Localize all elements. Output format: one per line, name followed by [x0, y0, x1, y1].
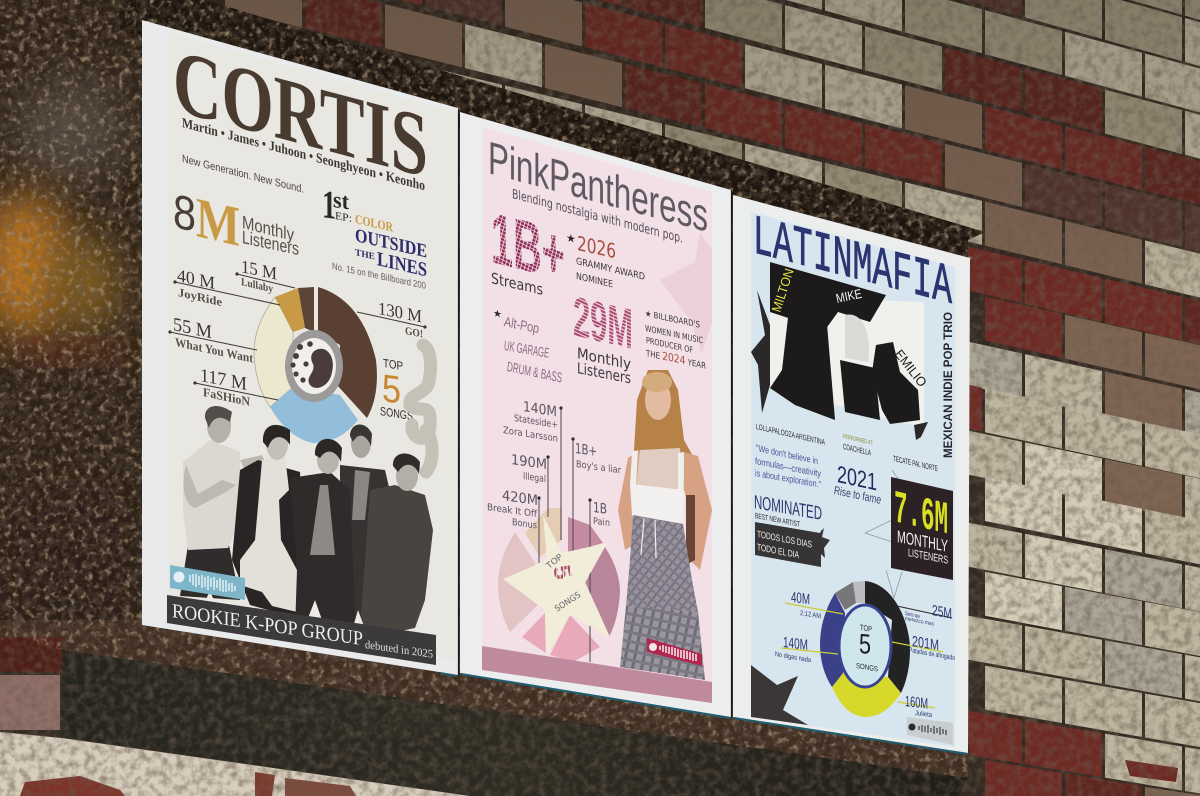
song labels with leader lines: 130 M — [378, 298, 422, 327]
peeled paint patch — [1125, 760, 1178, 782]
star: top 5 songs: TOP — [544, 552, 565, 572]
stat: 29M monthly listeners: Monthly — [577, 344, 631, 373]
EP callout: st — [333, 186, 349, 214]
festival labels — [756, 422, 938, 473]
stat: 8M monthly listeners: 8 — [173, 184, 196, 243]
song labels with leader lines: 15 M — [241, 256, 277, 284]
callout: Billboard award: ★ BILLBOARD'S — [645, 309, 700, 331]
song labels: 201M — [912, 633, 939, 654]
song labels: 40M — [791, 589, 810, 608]
callout: Billboard award: PRODUCER OF — [646, 336, 693, 356]
genre list — [493, 308, 562, 386]
EP callout: EP: — [335, 210, 352, 225]
song labels: Break It Off — [487, 502, 537, 520]
footer band — [482, 646, 712, 703]
EP callout — [322, 181, 427, 292]
song labels: Illegal — [523, 471, 546, 485]
heading: PinkPantheress: PinkPantheress — [488, 132, 708, 242]
decorative squiggle shape — [410, 345, 432, 472]
poster: PinkPantheress — [460, 112, 731, 717]
stat: 29M monthly listeners: 29M — [573, 286, 633, 362]
song labels: 1B+ — [575, 441, 597, 460]
poster seams — [458, 110, 732, 717]
stat: 8M monthly listeners: Listeners — [242, 227, 299, 259]
footer band: debuted in 2025 — [365, 639, 433, 661]
EP callout: COLOR — [355, 211, 393, 235]
star: top 5 songs — [503, 515, 610, 656]
stat: 1B+ streams — [491, 198, 565, 299]
EP callout: OUTSIDE — [355, 225, 427, 263]
dark star corner — [751, 665, 808, 725]
stat box: 7.6M monthly listeners — [891, 477, 953, 580]
song labels: 1B — [593, 500, 607, 518]
overhead steel beam — [120, 0, 985, 270]
callout: Billboard award — [645, 309, 706, 372]
stat: 29M monthly listeners: Listeners — [577, 359, 631, 387]
callout: Grammy nominee: 2026 — [577, 231, 616, 263]
song labels: Patadas de ahogado — [909, 647, 955, 662]
EP callout: No. 15 on the Billboard 200 — [332, 261, 426, 292]
song labels: Julieta — [915, 710, 932, 719]
heading: CORTIS: CORTIS — [173, 30, 428, 198]
EP callout: LINES — [377, 248, 427, 281]
quote: "We don't believe in — [756, 443, 818, 467]
outlined star decoration — [865, 470, 902, 598]
donut chart: top 5 songs — [820, 581, 910, 717]
callout: top 5 songs: SONGS — [380, 404, 413, 423]
stat box: 7.6M monthly listeners: 7.6M — [894, 483, 948, 547]
poster: CORTIS — [142, 20, 458, 675]
quote — [755, 443, 821, 491]
footer band — [167, 595, 436, 665]
photo: trio collage — [751, 262, 930, 440]
icon: music scan code — [907, 717, 953, 745]
callout: top 5 songs: TOP — [383, 356, 403, 373]
icon: music scan code — [647, 638, 702, 666]
icon: music scan code — [170, 565, 245, 600]
callout: top 5 songs — [380, 356, 413, 423]
callout: Billboard award: THE 2024 YEAR — [645, 346, 706, 372]
stat: 8M monthly listeners: Monthly — [242, 211, 295, 245]
quote: formulas—creativity — [755, 456, 821, 480]
star: top 5 songs: SONGS — [553, 590, 583, 615]
year callout: Rise to fame — [834, 483, 881, 507]
song labels — [487, 399, 621, 532]
callout: Grammy nominee — [566, 231, 645, 291]
donut chart: top 5 songs: TOP — [860, 623, 872, 634]
callout: top 5 songs: 5 — [382, 367, 401, 413]
song labels: 420M — [502, 488, 538, 509]
song labels: Zora Larsson — [503, 425, 558, 445]
nominated callout: TODOS LOS DIAS — [757, 529, 812, 551]
song labels with leader lines: 55 M — [173, 314, 212, 343]
song labels: Boy's a liar — [576, 459, 621, 476]
genre list: ★ — [493, 308, 502, 321]
poster: Latin Mafia — [733, 195, 970, 753]
donut chart: top 5 songs: 5 — [859, 628, 871, 660]
song labels: Pain — [593, 516, 610, 529]
stat box: 7.6M monthly listeners: MONTHLY — [897, 526, 948, 556]
nominated callout: NOMINATED — [754, 492, 822, 525]
song labels: 160M — [905, 693, 928, 713]
song labels with leader lines: What You Want — [175, 335, 254, 366]
festival labels: COACHELLA — [843, 442, 871, 458]
year callout — [834, 461, 881, 507]
callout: Grammy nominee: GRAMMY AWARD — [576, 256, 645, 283]
heading: LATINMAFIA: LATINMAFIA — [753, 207, 952, 321]
icon: hub swirl motif — [285, 330, 343, 402]
nominated callout — [754, 492, 830, 567]
stat box: 7.6M monthly listeners: LISTENERS — [908, 547, 948, 567]
tagline: New Generation. New Sound. — [182, 153, 304, 196]
tagline: Blending nostalgia with modern pop. — [512, 187, 683, 247]
year callout: 2021 — [837, 461, 877, 496]
song labels: Stateside+ — [514, 413, 558, 431]
song labels: Siento que — [905, 611, 920, 620]
song labels: 25M — [932, 602, 952, 623]
EP callout: THE — [355, 247, 375, 263]
song labels with leader lines — [168, 256, 427, 409]
stat: 8M monthly listeners — [173, 184, 299, 259]
song labels with leader lines: FaSHioN — [203, 385, 250, 409]
quote: is about exploration." — [755, 468, 821, 491]
genre list: Alt-Pop — [503, 313, 539, 336]
stat: 1B+ streams: 1B+ — [491, 198, 565, 296]
song labels with leader lines: GO! — [405, 325, 423, 340]
star: top 5 songs: 5 — [547, 563, 576, 582]
name label: Mike: MIKE — [835, 286, 863, 306]
festival labels: PERFORMED AT: — [843, 434, 873, 447]
nominated callout: BEST NEW ARTIST — [755, 511, 800, 529]
song labels: 140M — [523, 399, 557, 420]
festival labels: TECATE PAL NORTE — [893, 454, 938, 473]
song labels: No digas nada — [775, 651, 811, 664]
song labels — [775, 589, 955, 719]
genre list: UK GARAGE — [504, 337, 549, 361]
song labels with leader lines: 40 M — [177, 265, 215, 293]
callout: Billboard award: WOMEN IN MUSIC — [645, 324, 703, 346]
song labels: merezco mas — [905, 616, 934, 628]
pie chart: top 5 songs — [254, 287, 377, 443]
footer band: ROOKIE K-POP GROUP — [172, 600, 363, 650]
rusted steel left block — [0, 0, 150, 650]
poster edge strips — [440, 673, 968, 754]
song labels with leader lines: Lullaby — [241, 276, 273, 295]
side label: MEXICAN INDIE POP TRIO — [943, 312, 955, 458]
lower rust band — [0, 620, 970, 778]
nominated callout: TODO EL DIA — [757, 542, 799, 561]
song labels: 190M — [511, 452, 547, 473]
song labels: 140M — [783, 634, 808, 654]
song labels with leader lines: 117 M — [200, 365, 247, 395]
festival labels: LOLLAPALOOZA ARGENTINA — [756, 422, 825, 447]
members line: Martin • James • Juhoon • Seonghyeon • Keonho — [182, 115, 425, 194]
callout: Grammy nominee: NOMINEE — [576, 271, 613, 291]
donut chart: top 5 songs: SONGS — [856, 661, 878, 673]
name label: Emilio: EMILIO — [892, 347, 930, 390]
song labels: Bonus — [512, 517, 537, 532]
genre list: DRUM & BASS — [507, 358, 562, 386]
name label: Milton: MILTON — [769, 266, 797, 314]
lower left bricks — [0, 637, 470, 796]
song labels with leader lines: JoyRide — [178, 285, 223, 309]
EP callout: 1 — [322, 181, 336, 228]
photo: five band members — [180, 406, 433, 642]
callout: Grammy nominee: ★ — [566, 231, 576, 246]
stat: 8M monthly listeners: M — [196, 187, 240, 259]
stat: 1B+ streams: Streams — [491, 269, 543, 299]
photo: singer — [618, 370, 712, 680]
song labels: 2:12 AM — [800, 610, 821, 620]
pie chart: top 5 songs — [498, 406, 620, 662]
decorative pale star shape — [660, 233, 712, 353]
stat: 29M monthly listeners — [573, 286, 633, 387]
dark recessed steel panel — [62, 650, 968, 796]
